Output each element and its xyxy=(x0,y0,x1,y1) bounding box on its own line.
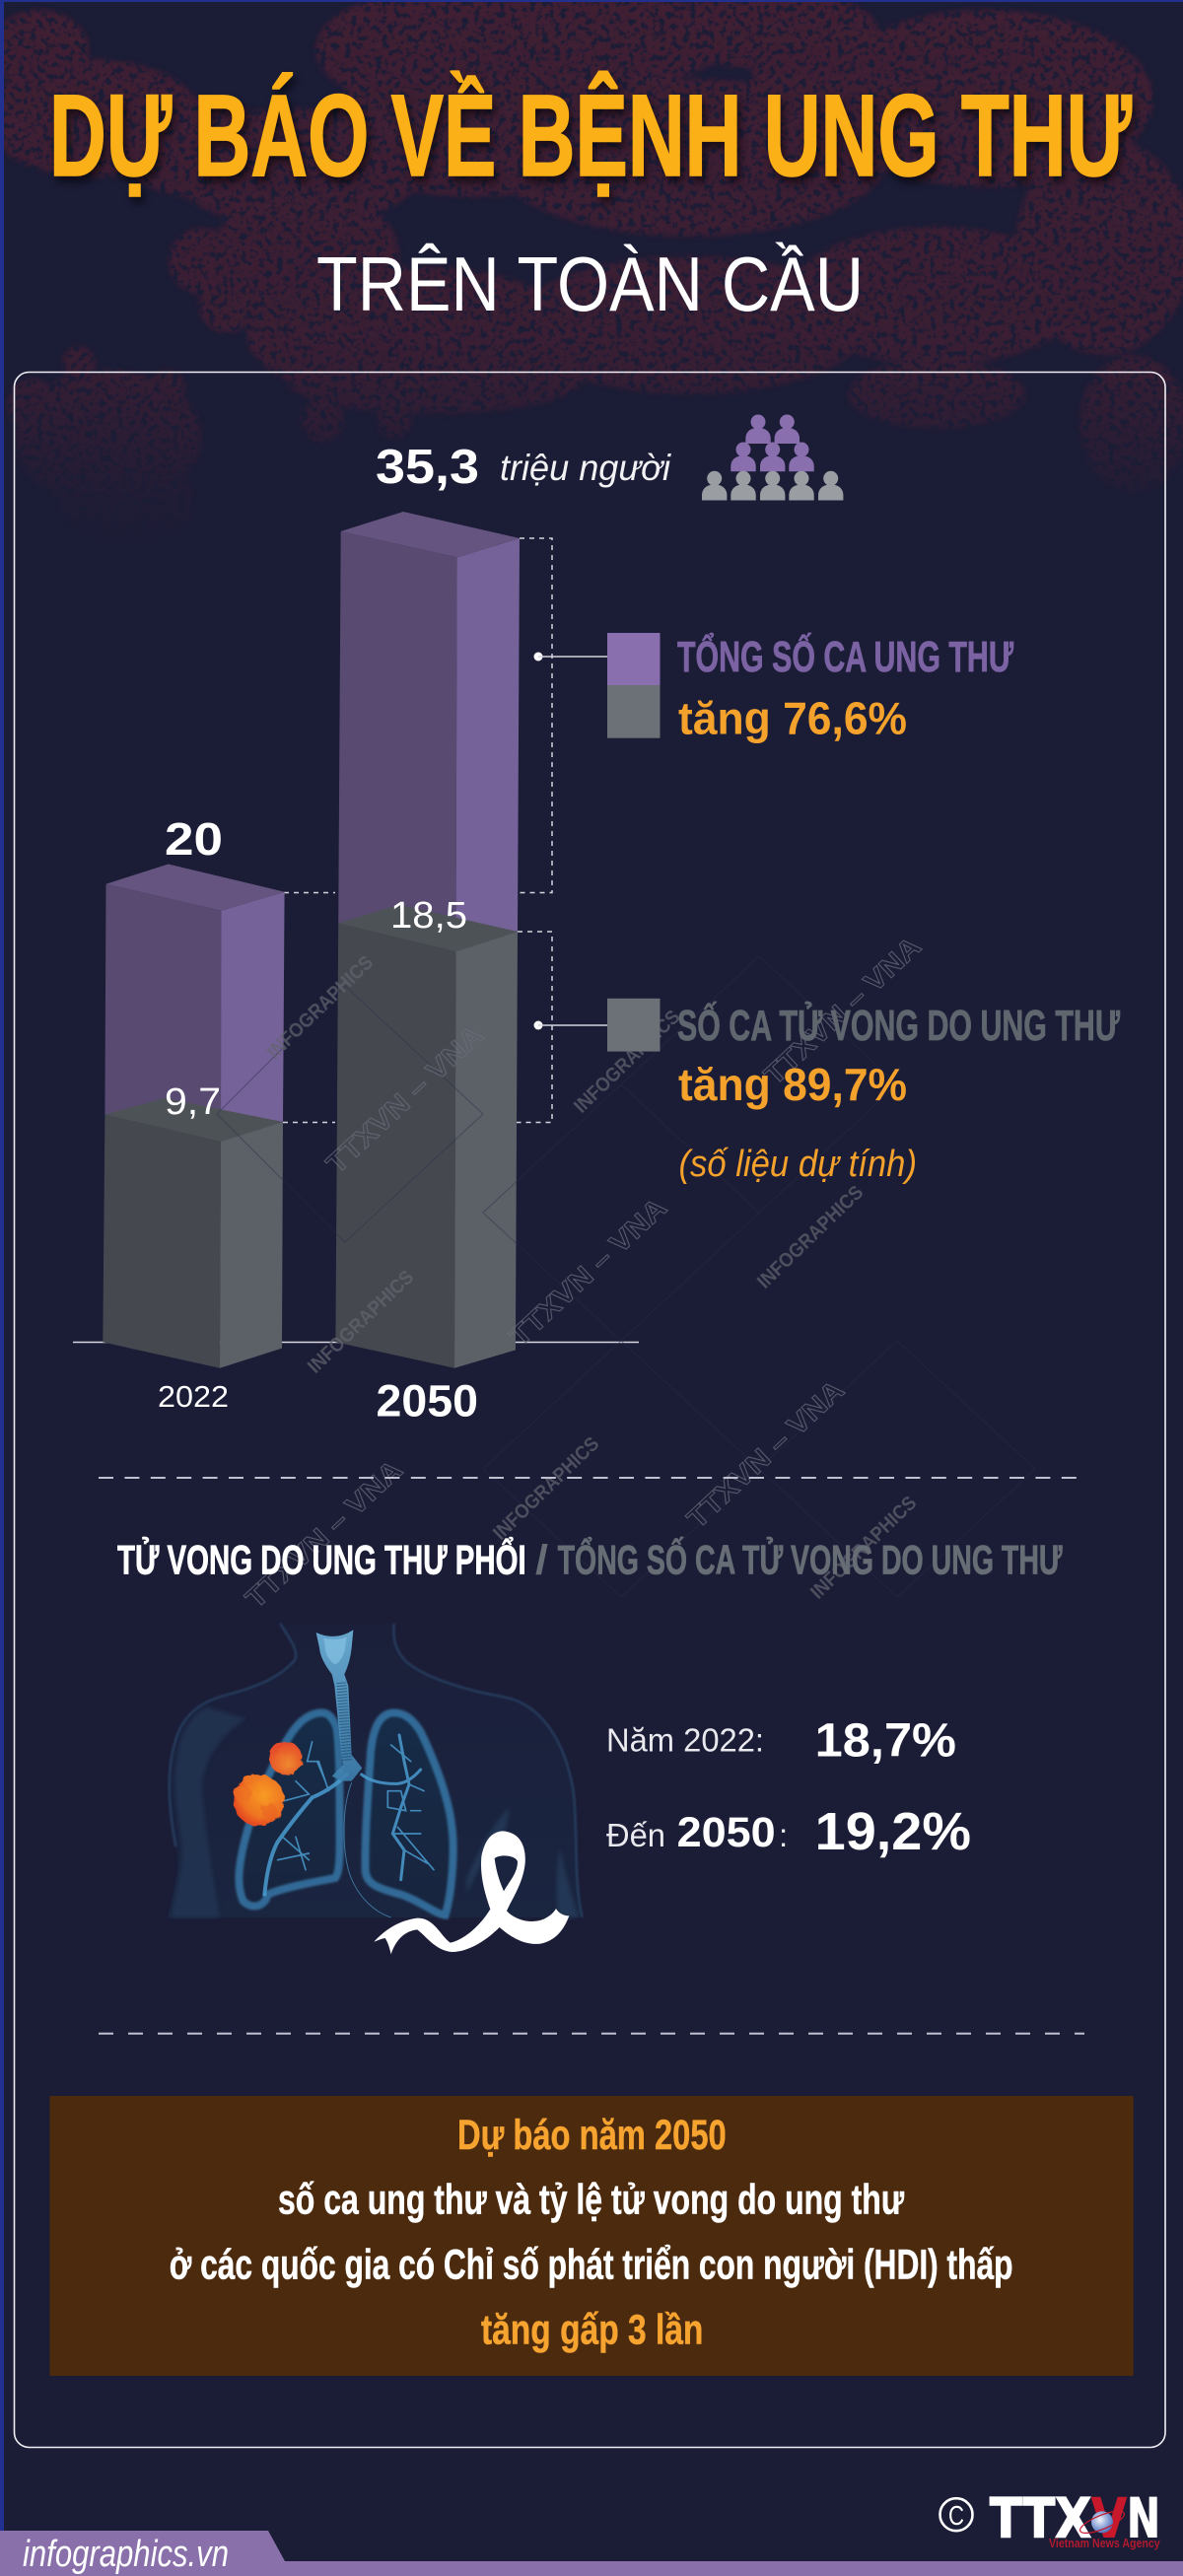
callout: 2050 forecast xyxy=(49,2096,1134,2376)
logo: TTXVN: Vietnam News Agency xyxy=(1049,2537,1160,2550)
total label: 35,3 million people: triệu người xyxy=(500,448,672,488)
note: projected figures: (số liệu dự tính) xyxy=(678,1144,917,1185)
bar: 2022 xyxy=(103,864,285,1368)
bar value labels: 2022 xyxy=(158,1379,229,1414)
callout: 2050 forecast: tăng gấp 3 lần xyxy=(481,2306,703,2353)
heading: lung cancer deaths share xyxy=(117,1535,1063,1583)
icon: trachea xyxy=(316,1630,362,1781)
bar value labels: 18,5 xyxy=(390,895,467,937)
bar value labels: 2050 xyxy=(377,1376,478,1426)
watermarks: INFOGRAPHICS xyxy=(489,1433,603,1545)
bar value labels: 9,7 xyxy=(165,1081,221,1123)
icon: small tumour xyxy=(269,1742,303,1775)
heading: lung cancer deaths share: / xyxy=(535,1537,548,1583)
watermarks: INFOGRAPHICS xyxy=(753,1182,868,1293)
icon: people pyramid xyxy=(702,414,843,501)
stats: lung cancer share: 19,2% xyxy=(815,1802,971,1861)
stats: lung cancer share: 2050 xyxy=(677,1809,776,1856)
callout: 2050 forecast: số ca ung thư và tỷ lệ tử vong do ung thư xyxy=(278,2177,905,2224)
total label: 35,3 million people: 35,3 xyxy=(376,441,479,494)
watermarks: INFOGRAPHICS xyxy=(806,1493,921,1604)
icon: right lung xyxy=(344,1712,453,1917)
divider top xyxy=(99,1477,1084,1479)
bar: 2050 xyxy=(335,512,520,1368)
watermarks xyxy=(240,931,927,1614)
stats: lung cancer share: Đến xyxy=(606,1817,665,1853)
watermarks: TTXVN – VNA xyxy=(320,1019,489,1179)
footer bar xyxy=(0,2531,1183,2576)
watermarks: TTXVN – VNA xyxy=(504,1192,672,1352)
legend: total cases: TỔNG SỐ CA UNG THƯ xyxy=(677,631,1013,681)
watermarks: TTXVN – VNA xyxy=(758,931,927,1090)
legend: deaths: tăng 89,7% xyxy=(678,1059,907,1110)
legend: total cases xyxy=(534,631,1013,743)
legend: deaths xyxy=(534,999,1120,1110)
stats: lung cancer share xyxy=(606,1715,971,1861)
bar value labels: 20 xyxy=(165,813,223,865)
watermarks: INFOGRAPHICS xyxy=(570,1007,684,1118)
watermark lattice xyxy=(217,956,1035,1597)
stats: lung cancer share: : xyxy=(779,1817,788,1853)
watermarks: TTXVN – VNA xyxy=(681,1374,850,1534)
logo: TTXVN xyxy=(940,2486,1160,2550)
icon: torso silhouette xyxy=(168,1624,583,1917)
bar value labels xyxy=(158,813,478,1426)
subtitle: TRÊN TOÀN CẦU xyxy=(316,241,864,327)
icon: awareness ribbon xyxy=(374,1831,569,1954)
watermarks: INFOGRAPHICS xyxy=(263,952,378,1064)
heading: lung cancer deaths share: TỬ VONG DO UNG THƯ PHỔI xyxy=(117,1535,526,1583)
icon: left lung xyxy=(239,1712,347,1906)
chart baseline xyxy=(73,1341,639,1343)
logo: TTXVN: V xyxy=(1091,2486,1127,2549)
background: red virus texture xyxy=(4,2,1183,485)
icon: large tumour xyxy=(233,1775,284,1826)
watermarks: TTXVN – VNA xyxy=(240,1454,408,1614)
watermarks: INFOGRAPHICS xyxy=(304,1267,418,1378)
panel: main frame xyxy=(14,373,1165,2447)
footer website: infographics.vn xyxy=(23,2534,229,2575)
dashed brackets xyxy=(283,538,552,1122)
illustration: lungs with tumours and ribbon xyxy=(168,1624,583,1954)
stats: lung cancer share: 18,7% xyxy=(815,1715,956,1768)
logo: TTXVN: TTX xyxy=(990,2486,1091,2549)
legend: total cases: tăng 76,6% xyxy=(678,692,907,743)
divider bottom xyxy=(99,2033,1084,2035)
callout: 2050 forecast: Dự báo năm 2050 xyxy=(457,2112,727,2159)
stats: lung cancer share: Năm 2022: xyxy=(606,1722,764,1759)
logo: TTXVN: N xyxy=(1127,2486,1160,2549)
logo: TTXVN: C xyxy=(948,2500,964,2531)
total label: 35,3 million people xyxy=(376,441,672,494)
